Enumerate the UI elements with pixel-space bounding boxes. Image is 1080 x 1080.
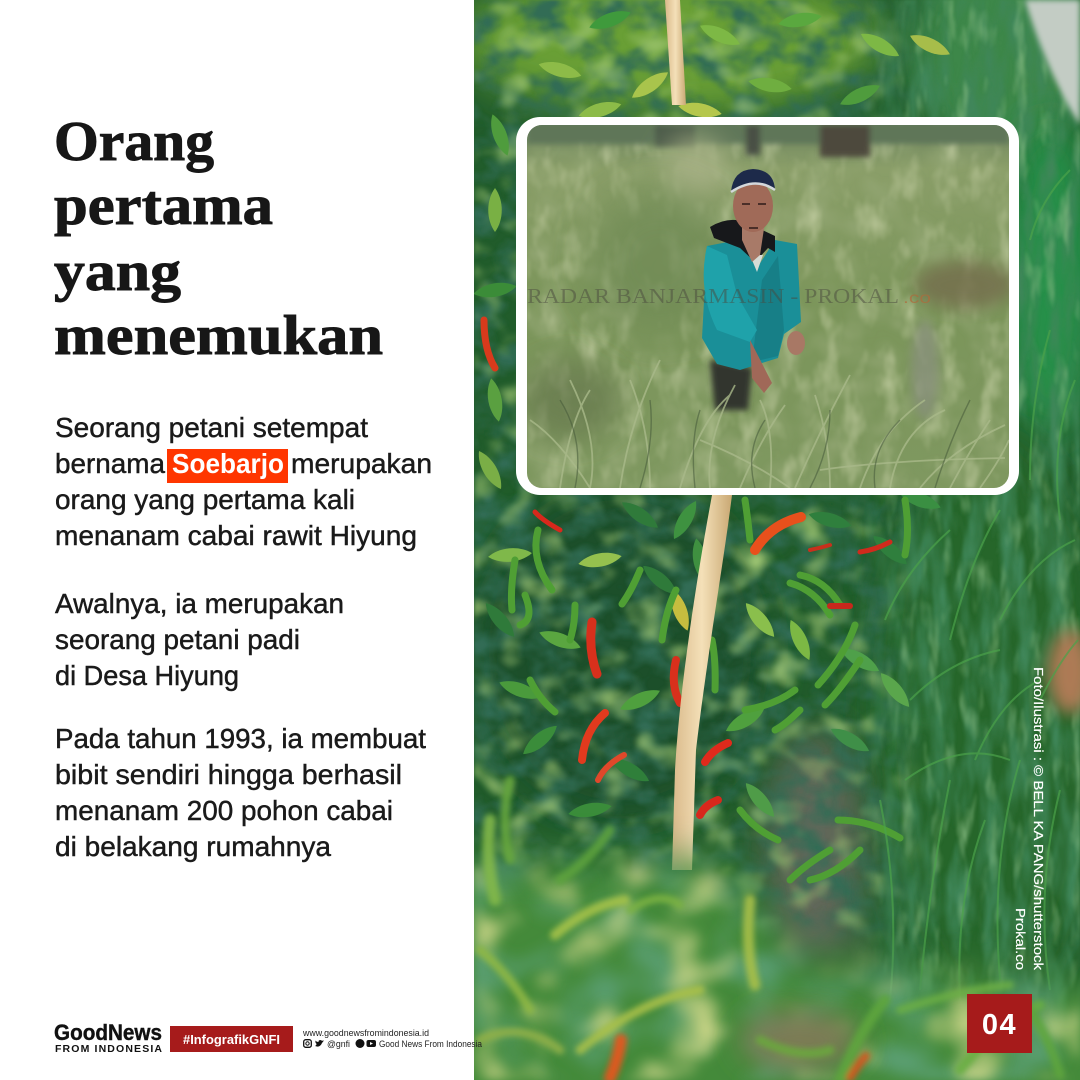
paragraph 2 bbox=[55, 588, 344, 691]
blurred foreground foliage bbox=[474, 780, 1080, 1080]
grass blades bbox=[880, 170, 1078, 1000]
paragraph 3: bibit sendiri hingga berhasil bbox=[55, 759, 402, 790]
paragraph 2: Awalnya, ia merupakan bbox=[55, 588, 344, 619]
website and social handles: Good News From Indonesia bbox=[379, 1039, 482, 1049]
red chilies bbox=[484, 320, 890, 815]
paragraph 1: Seorang petani setempat bbox=[55, 412, 368, 443]
leaves bbox=[472, 6, 953, 821]
foreground grass bbox=[530, 360, 1009, 488]
hashtag badge bbox=[170, 1026, 293, 1052]
soil patch bbox=[1048, 630, 1080, 714]
bush behind the farmer bbox=[520, 138, 1015, 440]
hashtag badge: #InfografikGNFI bbox=[183, 1032, 280, 1047]
left sleeve bbox=[704, 246, 757, 342]
icon: twitter bbox=[315, 1040, 324, 1047]
photo card: farmer in the field bbox=[516, 117, 1019, 495]
photo credit: Prokal.co bbox=[1013, 908, 1028, 970]
icon: instagram bbox=[304, 1040, 311, 1047]
page number bbox=[967, 994, 1032, 1053]
title: menemukan bbox=[54, 305, 383, 367]
right hand bbox=[787, 331, 805, 355]
trousers bbox=[710, 360, 752, 410]
paragraph 2: seorang petani padi bbox=[55, 624, 300, 655]
logo: GoodNews From Indonesia: FROM INDONESIA bbox=[55, 1043, 162, 1055]
paragraph 3: menanam 200 pohon cabai bbox=[55, 795, 393, 826]
white text panel bbox=[0, 0, 474, 1080]
page number: 04 bbox=[982, 1009, 1017, 1041]
icon: youtube bbox=[366, 1040, 376, 1047]
cap bbox=[731, 169, 775, 192]
paragraph 1: menanam cabai rawit Hiyung bbox=[55, 520, 417, 551]
highlight: Soebarjo: Soebarjo bbox=[172, 448, 284, 479]
logo: GoodNews From Indonesia: GoodNews bbox=[54, 1020, 162, 1045]
hoodie collar bbox=[710, 220, 775, 262]
photo credit bbox=[1013, 667, 1046, 971]
paragraph 2: di Desa Hiyung bbox=[55, 660, 239, 691]
green chilies bbox=[511, 500, 908, 880]
title: yang bbox=[54, 241, 181, 303]
title: pertama bbox=[54, 175, 273, 237]
watermark logo: .co bbox=[903, 290, 931, 307]
pale road corner bbox=[1025, 0, 1080, 125]
paragraph 3 bbox=[55, 723, 426, 862]
photo credit: Foto/Ilustrasi : © BELL KA PANG/shutterstock bbox=[1031, 667, 1046, 971]
paragraph 3: di belakang rumahnya bbox=[55, 831, 331, 862]
background photo: chili plants bbox=[460, 0, 1080, 1080]
website and social handles bbox=[302, 1028, 482, 1049]
neck bbox=[742, 228, 764, 262]
watermark: RADAR BANJARMASIN - PROKAL bbox=[527, 284, 899, 308]
farmer bbox=[702, 169, 805, 410]
website and social handles: @gnfi bbox=[327, 1039, 350, 1049]
paragraph 1: orang yang pertama kali bbox=[55, 484, 355, 515]
head bbox=[733, 180, 773, 232]
facial features bbox=[742, 204, 766, 228]
icon: facebook bbox=[356, 1039, 364, 1048]
title bbox=[54, 111, 383, 367]
paragraph 1: merupakan bbox=[291, 448, 432, 479]
paragraph 1: bernama bbox=[55, 448, 165, 479]
jacket shadow bbox=[752, 256, 784, 362]
left hand bbox=[750, 340, 772, 393]
tree line bbox=[527, 122, 1009, 157]
shirt bbox=[752, 255, 763, 272]
title: Orang bbox=[54, 111, 214, 173]
paragraph 1 bbox=[55, 412, 432, 551]
bamboo sticks bbox=[665, 0, 732, 870]
paragraph 3: Pada tahun 1993, ia membuat bbox=[55, 723, 426, 754]
logo: GoodNews From Indonesia bbox=[54, 1020, 162, 1055]
website and social handles: www.goodnewsfromindonesia.id bbox=[302, 1028, 429, 1039]
jacket body bbox=[702, 240, 801, 370]
